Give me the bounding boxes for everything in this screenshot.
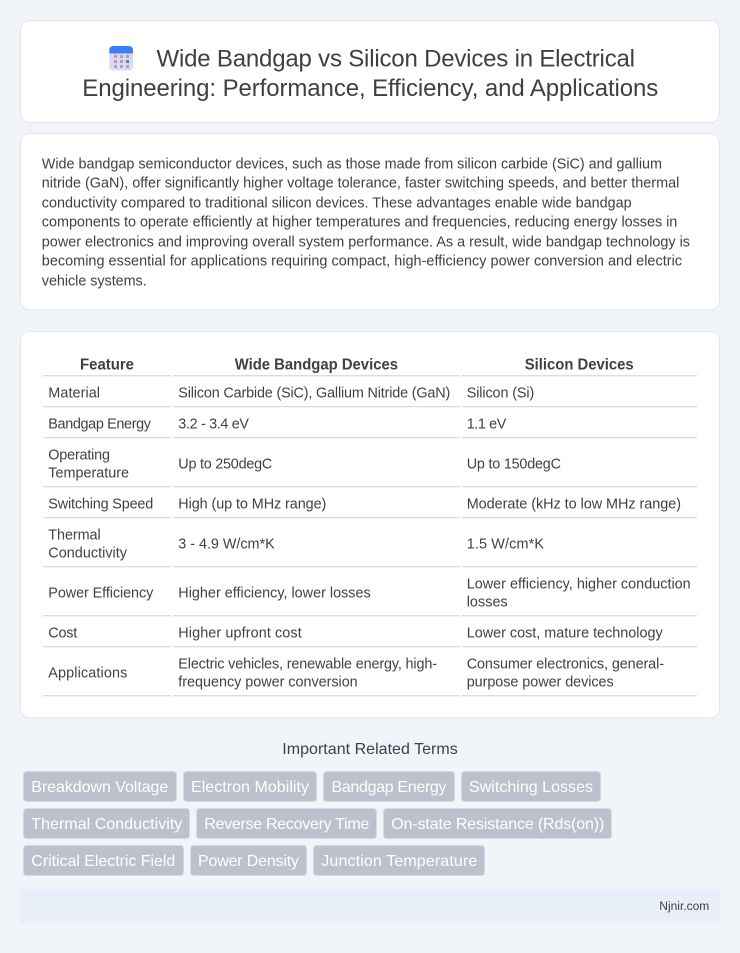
row: switching speed: High (up to MHz range) xyxy=(178,496,326,512)
row: bandgap energy: Bandgap Energy xyxy=(48,416,152,432)
row: material xyxy=(43,385,697,407)
tag: critical electric field xyxy=(24,846,184,876)
tag: critical electric field: Critical Electric Field xyxy=(31,853,175,870)
tag: electron mobility xyxy=(184,772,316,802)
tag: electron mobility: Electron Mobility xyxy=(191,779,309,796)
tag: reverse recovery time: Reverse Recovery Time xyxy=(204,816,369,833)
row: thermal conductivity: Thermal xyxy=(48,527,101,543)
row: cost: Lower cost, mature technology xyxy=(467,625,663,641)
row: operating temperature: Up to 250degC xyxy=(178,456,272,472)
row: power efficiency: Higher efficiency, lower losses xyxy=(178,585,371,601)
row: thermal conductivity: 3 - 4.9 W/cm*K xyxy=(178,536,275,552)
row: operating temperature: Up to 150degC xyxy=(467,456,561,472)
tag: thermal conductivity xyxy=(24,808,190,838)
tag: on-state resistance xyxy=(384,808,612,838)
row: thermal conductivity xyxy=(43,527,697,567)
tag: bandgap energy xyxy=(324,772,454,802)
row: switching speed: Switching Speed xyxy=(48,496,153,512)
tag: switching losses xyxy=(462,772,600,802)
text block: description: vehicle systems. xyxy=(42,273,147,289)
row: material: Silicon Carbide (SiC), Gallium Nitride (GaN) xyxy=(178,385,450,401)
row: cost: Higher upfront cost xyxy=(178,625,302,641)
row: material: Silicon (Si) xyxy=(467,385,534,401)
title: Engineering: Performance, Efficiency, and Applications xyxy=(82,75,658,102)
panel: comparison table xyxy=(20,332,720,718)
tag: on-state resistance: On-state Resistance (Rds(on)) xyxy=(391,816,604,833)
row: bandgap energy: 3.2 - 3.4 eV xyxy=(178,416,249,432)
tag: breakdown voltage: Breakdown Voltage xyxy=(31,779,168,796)
panel: introduction xyxy=(20,134,720,310)
row: material: Material xyxy=(48,385,100,401)
row: applications xyxy=(43,656,697,696)
row: applications: frequency power conversion xyxy=(178,674,358,690)
text block: description: nitride (GaN), offer significantly higher voltage tolerance, faster switching speeds, and better thermal xyxy=(42,175,679,191)
row: power efficiency: losses xyxy=(467,594,508,610)
text block: description: power electronics and improving overall system performance. As a result, wide bandgap technology is xyxy=(42,234,690,250)
table header row xyxy=(43,356,697,376)
table header row: Wide Bandgap Devices xyxy=(235,356,398,373)
row: power efficiency: Lower efficiency, higher conduction xyxy=(467,576,691,592)
row: applications: purpose power devices xyxy=(467,674,614,690)
text block: description: conductivity compared to traditional silicon devices. These advantages enable wide bandgap xyxy=(42,195,632,211)
text block: description: becoming essential for applications requiring compact, high-efficiency power conversion and electric xyxy=(42,253,682,269)
tag: junction temperature: Junction Temperature xyxy=(321,853,477,870)
row: switching speed: Moderate (kHz to low MHz range) xyxy=(467,496,681,512)
panel: header xyxy=(20,20,720,122)
tag: power density xyxy=(190,846,306,876)
text block: description: components to operate efficiently at higher temperatures and frequencies, reducing energy losses in xyxy=(42,214,677,230)
footer: Njnir.com xyxy=(659,899,709,913)
icon: calendar xyxy=(109,46,133,70)
heading: related terms: Important Related Terms xyxy=(282,741,458,758)
tag: reverse recovery time xyxy=(196,808,376,838)
row: operating temperature xyxy=(43,447,697,487)
footer xyxy=(20,889,720,923)
tag: bandgap energy: Bandgap Energy xyxy=(332,779,446,796)
row: applications: Electric vehicles, renewable energy, high- xyxy=(178,656,437,672)
row: cost: Cost xyxy=(48,625,77,641)
row: thermal conductivity: 1.5 W/cm*K xyxy=(467,536,544,552)
tag: breakdown voltage xyxy=(24,772,176,802)
table header row: Feature xyxy=(80,356,134,373)
row: cost xyxy=(43,625,697,647)
tag: switching losses: Switching Losses xyxy=(469,779,593,796)
text block: description: Wide bandgap semiconductor devices, such as those made from silicon carbide (SiC) and gallium xyxy=(42,156,662,172)
title: Wide Bandgap vs Silicon Devices in Electrical xyxy=(156,46,635,73)
tag: thermal conductivity: Thermal Conductivity xyxy=(31,816,182,833)
table header row: Silicon Devices xyxy=(525,356,634,373)
row: applications: Applications xyxy=(48,665,127,681)
row: operating temperature: Operating xyxy=(48,447,110,463)
tags: related terms xyxy=(24,772,612,876)
tag: power density: Power Density xyxy=(198,853,299,870)
title xyxy=(82,46,658,102)
row: operating temperature: Temperature xyxy=(48,465,129,481)
row: thermal conductivity: Conductivity xyxy=(48,545,128,561)
row: power efficiency xyxy=(43,576,697,616)
row: switching speed xyxy=(43,496,697,518)
tag: junction temperature xyxy=(314,846,484,876)
row: power efficiency: Power Efficiency xyxy=(48,585,154,601)
text block: description xyxy=(42,156,690,289)
row: bandgap energy: 1.1 eV xyxy=(467,416,507,432)
row: applications: Consumer electronics, general- xyxy=(467,656,664,672)
row: bandgap energy xyxy=(43,416,697,438)
